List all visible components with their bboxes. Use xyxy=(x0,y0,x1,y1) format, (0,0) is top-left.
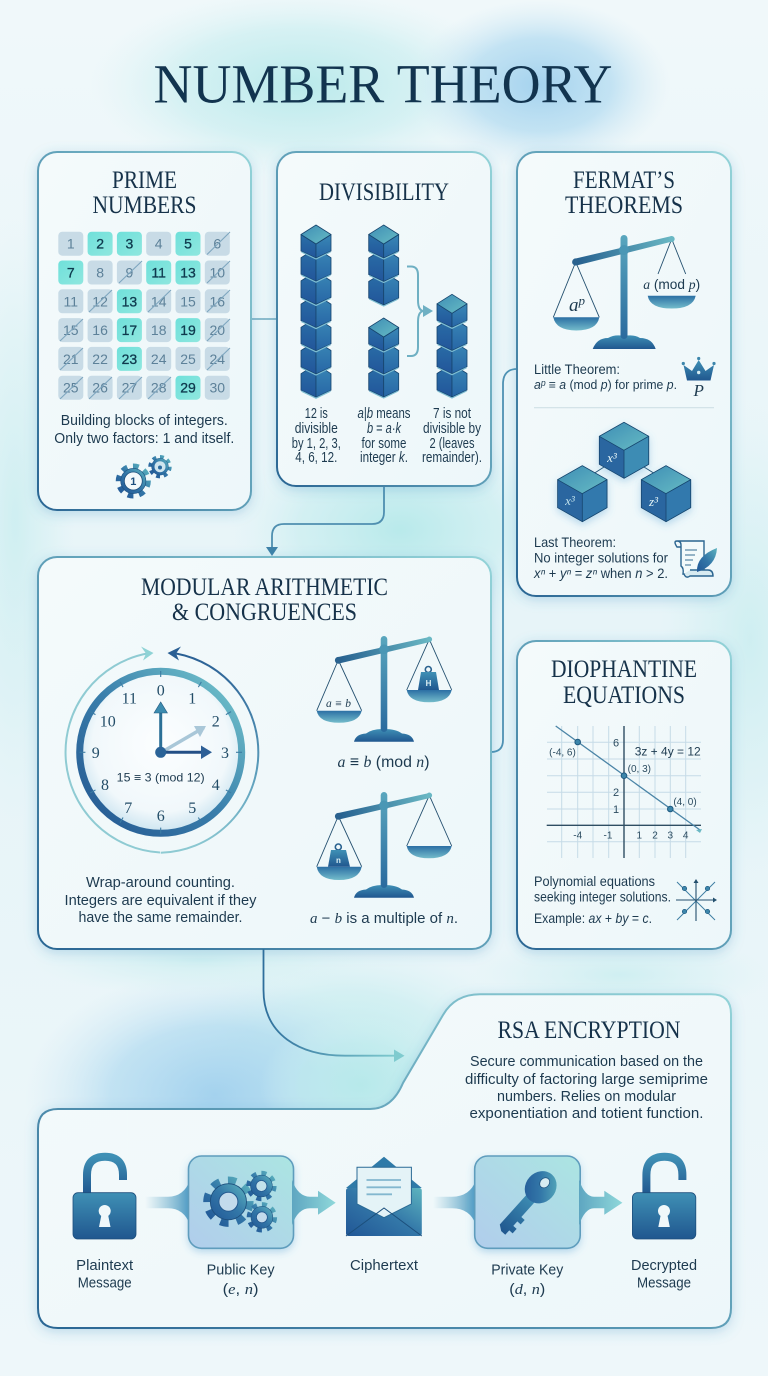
label: public key xyxy=(207,1262,275,1298)
icon: balance scale with weight on right: H xyxy=(426,679,432,688)
icon: clock: 10 xyxy=(100,714,116,730)
icon: scroll and quill xyxy=(675,541,717,577)
description: difficulty of factoring large semiprime xyxy=(465,1072,708,1088)
caption: column one: 12 is xyxy=(305,406,328,422)
heading xyxy=(565,167,683,219)
icon: clock: 0 xyxy=(157,682,165,700)
text: last theorem: xⁿ + yⁿ = zⁿ when n > 2. xyxy=(533,565,668,581)
cube stack: 12 xyxy=(301,225,331,398)
icon: clock: 15 ≡ 3 (mod 12) xyxy=(117,770,205,784)
graph xyxy=(547,726,702,858)
equation: a ≡ b (mod n) xyxy=(338,754,430,771)
arrow: plaintext to public key xyxy=(145,1180,190,1225)
connector: prime numbers to divisibility xyxy=(251,318,277,320)
icon: balance scale: a xyxy=(569,295,578,316)
title: NUMBER THEORY xyxy=(154,54,612,114)
caption: column one: 4, 6, 12. xyxy=(295,450,337,466)
panel: fermat's theorems xyxy=(517,152,731,596)
graph: 2 xyxy=(613,787,619,799)
graph: 3z + 4y = 12 xyxy=(635,744,701,758)
caption: column two xyxy=(358,406,410,466)
description: Polynomial equations xyxy=(534,873,655,889)
heading: FERMAT’S xyxy=(573,167,675,194)
graph: 1 xyxy=(613,804,619,816)
heading: THEOREMS xyxy=(565,192,683,219)
icon: crown xyxy=(682,357,716,400)
bracket arrow xyxy=(407,266,433,356)
number grid: 2 xyxy=(96,236,104,252)
panel: diophantine equations xyxy=(517,641,731,949)
icon: clock xyxy=(66,646,258,853)
arrow: private key to decrypted xyxy=(579,1180,622,1225)
label: public key: (e, n) xyxy=(223,1282,259,1298)
icon: clock: 6 xyxy=(157,808,165,825)
number grid: 30 xyxy=(210,380,225,396)
heading: DIOPHANTINE xyxy=(551,656,697,683)
caption: column two: integer k. xyxy=(360,450,408,466)
description: have the same remainder. xyxy=(78,910,242,926)
number grid: 19 xyxy=(180,322,196,338)
description: Secure communication based on the xyxy=(470,1054,703,1070)
description: exponentiation and totient function. xyxy=(470,1106,704,1122)
icon: open lock, plaintext xyxy=(73,1157,136,1239)
caption: column one xyxy=(292,406,341,466)
description: Integers are equivalent if they xyxy=(64,893,257,909)
graph: -1 xyxy=(604,830,613,842)
number grid: 24 xyxy=(151,351,167,367)
number grid: 28 xyxy=(151,380,167,396)
description xyxy=(54,413,234,447)
cube stack: top factor xyxy=(369,225,399,306)
caption: column two: for some xyxy=(362,436,406,452)
panel: divisibility xyxy=(277,152,491,486)
label: public key: Public Key xyxy=(207,1262,275,1278)
label: plaintext message: Message xyxy=(78,1276,132,1292)
panel: prime numbers xyxy=(38,152,251,510)
caption: column one: divisible xyxy=(295,421,338,437)
description xyxy=(465,1054,708,1122)
number grid: 17 xyxy=(122,322,137,338)
description: Example: ax + by = c. xyxy=(534,910,652,926)
panel: modular arithmetic and congruences xyxy=(38,557,491,949)
icon: balance scale: a (mod p) xyxy=(643,276,700,293)
number grid: 20 xyxy=(210,322,225,338)
label: ciphertext: Ciphertext xyxy=(350,1258,418,1274)
icon: clock: 4 xyxy=(212,777,220,794)
number grid: 16 xyxy=(92,322,108,338)
caption: column one: by 1, 2, 3, xyxy=(292,436,341,452)
caption: column two: b = a·k xyxy=(367,421,402,437)
cube stack: 7 xyxy=(437,294,467,398)
number grid: 25 xyxy=(63,380,79,396)
text: last theorem: Last Theorem: xyxy=(534,534,616,550)
heading: NUMBERS xyxy=(92,192,196,219)
number grid xyxy=(58,232,230,400)
arrow: ciphertext to private key xyxy=(433,1180,476,1225)
icon: crown: P xyxy=(693,381,704,400)
connector: fermat to diophantine to modular xyxy=(491,369,517,752)
public key box xyxy=(188,1156,294,1248)
caption: column two: a|b means xyxy=(358,406,410,422)
icon: balance scale: p xyxy=(578,293,586,308)
number grid: 11 xyxy=(64,293,78,309)
number grid: 15 xyxy=(63,322,79,338)
heading: MODULAR ARITHMETIC xyxy=(141,574,388,601)
number grid: 7 xyxy=(67,264,75,280)
number grid: 13 xyxy=(122,293,137,309)
heading: RSA ENCRYPTION xyxy=(498,1017,680,1044)
label: private key xyxy=(491,1262,564,1298)
graph: 1 xyxy=(637,830,643,842)
wrap-around arcs xyxy=(66,646,258,853)
icon: open lock, decrypted xyxy=(632,1157,696,1239)
number grid: 8 xyxy=(96,264,104,280)
icon: balance scale with weight on left: n xyxy=(336,856,341,865)
heading xyxy=(141,574,388,626)
icon: x y z cubes xyxy=(558,422,691,522)
number grid: 21 xyxy=(63,351,79,367)
icon: integer lattice axes xyxy=(676,879,717,921)
text: last theorem xyxy=(533,534,668,581)
caption: column three: 2 (leaves xyxy=(430,436,474,452)
text: little theorem xyxy=(534,361,677,392)
number grid: 15 xyxy=(180,293,196,309)
description: Building blocks of integers. xyxy=(61,413,228,429)
icon: clock: 3 xyxy=(221,745,229,762)
description: Only two factors: 1 and itself. xyxy=(54,431,234,447)
caption: column three xyxy=(422,406,482,466)
graph: 6 xyxy=(613,738,619,750)
heading xyxy=(92,167,196,219)
connector: divisibility to modular arithmetic xyxy=(266,486,384,556)
arrow: public key to ciphertext xyxy=(292,1180,336,1225)
icon: envelope xyxy=(346,1157,422,1236)
caption: column three: 7 is not xyxy=(433,406,471,422)
number grid: 4 xyxy=(155,236,163,252)
icon: clock: 1 xyxy=(188,690,196,708)
label: plaintext message xyxy=(76,1258,133,1292)
number grid: 12 xyxy=(92,293,108,309)
number grid: 1 xyxy=(67,236,75,252)
cube stack: bottom factor xyxy=(369,318,399,398)
text: little theorem: aᵖ ≡ a (mod p) for prime p. xyxy=(534,378,677,392)
icon: x y z cubes: z³ xyxy=(648,494,659,509)
number grid: 18 xyxy=(151,322,167,338)
icon: clock: 5 xyxy=(188,800,196,817)
description: seeking integer solutions. xyxy=(534,888,671,904)
number grid: 16 xyxy=(210,293,225,309)
label: decrypted message xyxy=(631,1258,697,1292)
number grid: 10 xyxy=(210,264,225,280)
icon: balance scale with weight on right: a ≡ b xyxy=(326,698,351,710)
number grid: 11 xyxy=(151,264,166,280)
caption: column three: divisible by xyxy=(423,421,482,437)
heading: EQUATIONS xyxy=(563,682,685,709)
graph: 3 xyxy=(668,830,674,842)
number grid: 26 xyxy=(92,380,108,396)
equation: a − b is a multiple of n. xyxy=(310,911,458,927)
icon: x y z cubes: x³ xyxy=(564,493,576,508)
number grid: 9 xyxy=(126,264,134,280)
label: private key: (d, n) xyxy=(509,1282,545,1298)
description xyxy=(64,875,257,926)
number grid: 3 xyxy=(126,236,134,252)
graph: 4 xyxy=(683,830,689,842)
connector: modular arithmetic to rsa xyxy=(264,949,404,1062)
graph: -4 xyxy=(573,830,583,842)
description: Wrap-around counting. xyxy=(86,875,235,891)
icon: clock: 8 xyxy=(101,777,109,794)
number grid: 14 xyxy=(151,293,167,309)
graph: (-4, 6) xyxy=(549,748,576,758)
graph: (0, 3) xyxy=(628,764,651,775)
graph: (4, 0) xyxy=(673,797,697,808)
text: little theorem: Little Theorem: xyxy=(534,361,620,377)
icon: gears: 1 xyxy=(130,476,136,488)
icon: x y z cubes: x³ xyxy=(606,450,618,465)
number grid: 6 xyxy=(213,236,221,252)
icon: clock: 2 xyxy=(212,714,220,730)
number grid: 29 xyxy=(180,380,196,396)
icon: balance scale with weight on right xyxy=(317,636,452,742)
number grid: 23 xyxy=(122,351,137,367)
text: last theorem: No integer solutions for xyxy=(534,550,668,566)
caption: column three: remainder). xyxy=(422,450,482,466)
number grid: 13 xyxy=(180,264,196,280)
private key box xyxy=(475,1156,580,1248)
icon: clock: 11 xyxy=(122,690,137,708)
heading: DIVISIBILITY xyxy=(319,179,449,206)
label: private key: Private Key xyxy=(491,1262,564,1278)
panel: rsa encryption xyxy=(38,994,731,1328)
heading xyxy=(551,656,697,709)
icon: balance scale xyxy=(553,235,700,349)
number grid: 24 xyxy=(210,351,225,367)
number grid: 25 xyxy=(180,351,196,367)
number grid: 27 xyxy=(122,380,137,396)
graph: 2 xyxy=(652,830,658,842)
label: decrypted message: Message xyxy=(637,1276,691,1292)
number grid: 22 xyxy=(92,351,108,367)
icon: gears xyxy=(119,457,170,496)
description xyxy=(534,873,671,926)
icon: clock: 7 xyxy=(124,800,132,817)
label: plaintext message: Plaintext xyxy=(76,1258,133,1274)
icon: clock: 9 xyxy=(92,745,100,762)
heading: & CONGRUENCES xyxy=(172,599,357,626)
heading: PRIME xyxy=(112,167,177,194)
number grid: 5 xyxy=(184,236,192,252)
description: numbers. Relies on modular xyxy=(497,1089,676,1105)
label: decrypted message: Decrypted xyxy=(631,1258,697,1274)
icon: balance scale with weight on left xyxy=(317,792,452,898)
